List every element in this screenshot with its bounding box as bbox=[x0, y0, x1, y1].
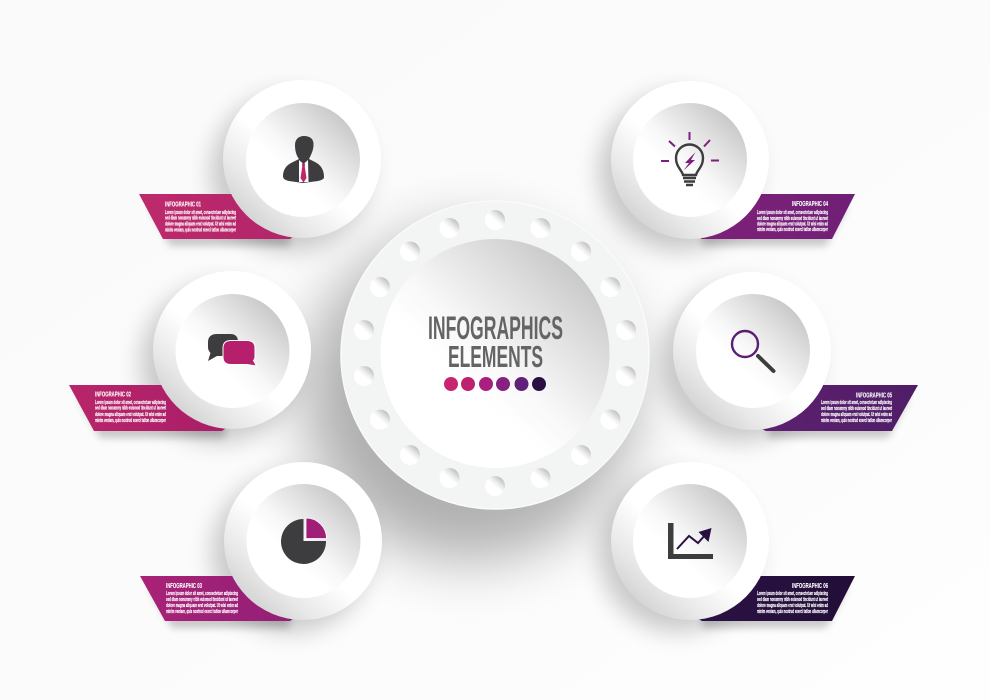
circle 01 bbox=[223, 80, 381, 238]
banner 04 text: sed diam nonummy nibh euismod tincidunt ut laoreet bbox=[757, 216, 828, 222]
banner 02 text: INFOGRAPHIC 02 bbox=[95, 392, 131, 398]
banner 05 bbox=[752, 385, 918, 431]
panel: infographic 06 bbox=[599, 462, 855, 632]
banner 01 text bbox=[165, 202, 236, 234]
banner 05 text: minim veniam, quis nostrud exerci tation ullamcorper bbox=[821, 418, 892, 424]
banner 01 text: dolore magna aliquam erat volutpat. Ut wisi enim ad bbox=[165, 222, 236, 228]
banner 03 text bbox=[166, 583, 238, 615]
banner 03 text: dolore magna aliquam erat volutpat. Ut wisi enim ad bbox=[166, 603, 238, 609]
circle 05 bbox=[673, 272, 831, 430]
central outer ring bbox=[341, 201, 649, 509]
banner 06 text: INFOGRAPHIC 06 bbox=[792, 583, 828, 590]
circle 04 bbox=[611, 81, 769, 239]
banner 01 text: sed diam nonummy nibh euismod tincidunt ut laoreet bbox=[165, 216, 236, 222]
ring of dimples bbox=[354, 210, 636, 496]
banner 05 text: INFOGRAPHIC 05 bbox=[856, 392, 892, 400]
central dish bbox=[380, 239, 610, 468]
banner 06 text: Lorem ipsum dolor sit amet, consectetuer adipiscing bbox=[757, 591, 828, 597]
banner 03 text: INFOGRAPHIC 03 bbox=[166, 583, 202, 590]
circle 03 bbox=[224, 462, 382, 620]
colour dots bbox=[444, 377, 546, 391]
panel: central circle bbox=[341, 201, 649, 509]
banner 01 text: minim veniam, quis nostrud exerci tation ullamcorper bbox=[165, 228, 236, 234]
banner 03 text: sed diam nonummy nibh euismod tincidunt ut laoreet bbox=[166, 597, 238, 603]
banner 02 text bbox=[95, 392, 166, 424]
banner 06 text: minim veniam, quis nostrud exerci tation ullamcorper bbox=[757, 609, 828, 615]
icon: businessman bbox=[283, 136, 324, 183]
central shadow bbox=[305, 230, 635, 560]
icon: speech bubbles bbox=[208, 334, 256, 366]
icon: light bulb bbox=[661, 132, 719, 185]
icon: growth chart bbox=[668, 523, 713, 559]
banner 05 text: dolore magna aliquam erat volutpat. Ut wisi enim ad bbox=[821, 412, 892, 418]
circle 06 bbox=[611, 462, 769, 620]
banner 05 text: Lorem ipsum dolor sit amet, consectetuer adipiscing bbox=[821, 400, 892, 406]
panel: infographic 04 bbox=[599, 81, 855, 251]
panel: infographic 05 bbox=[661, 272, 918, 442]
title: INFOGRAPHICS bbox=[428, 310, 563, 346]
banner 04 text bbox=[757, 201, 828, 233]
banner 02 text: sed diam nonummy nibh euismod tincidunt ut laoreet bbox=[95, 406, 166, 412]
banner 02 text: minim veniam, quis nostrud exerci tation ullamcorper bbox=[95, 418, 166, 424]
icon: magnifier bbox=[732, 331, 774, 371]
banner 04 text: INFOGRAPHIC 04 bbox=[792, 201, 828, 208]
panel: infographic 03 bbox=[140, 462, 382, 632]
title: ELEMENTS bbox=[448, 339, 543, 374]
circle 02 bbox=[153, 271, 311, 429]
panel: infographic 02 bbox=[69, 271, 311, 442]
banner 01 text: Lorem ipsum dolor sit amet, consectetuer adipiscing bbox=[165, 210, 236, 216]
banner 05 text: sed diam nonummy nibh euismod tincidunt ut laoreet bbox=[821, 406, 892, 412]
banner 03 text: Lorem ipsum dolor sit amet, consectetuer adipiscing bbox=[166, 591, 238, 597]
banner 04 text: dolore magna aliquam erat volutpat. Ut wisi enim ad bbox=[757, 222, 828, 228]
banner 03 text: minim veniam, quis nostrud exerci tation ullamcorper bbox=[166, 609, 238, 615]
banner 04 text: minim veniam, quis nostrud exerci tation ullamcorper bbox=[757, 227, 828, 233]
banner 03 bbox=[140, 576, 300, 621]
banner 04 text: Lorem ipsum dolor sit amet, consectetuer adipiscing bbox=[757, 210, 828, 216]
banner 06 text bbox=[757, 583, 828, 615]
banner 05 text bbox=[821, 392, 892, 424]
banner 02 text: dolore magna aliquam erat volutpat. Ut wisi enim ad bbox=[95, 412, 166, 418]
banner 02 text: Lorem ipsum dolor sit amet, consectetuer adipiscing bbox=[95, 400, 166, 406]
banner 04 bbox=[690, 194, 855, 239]
icon: pie chart bbox=[281, 518, 326, 564]
banner 02 bbox=[69, 385, 230, 431]
banner 06 text: sed diam nonummy nibh euismod tincidunt ut laoreet bbox=[757, 597, 828, 603]
title bbox=[428, 310, 563, 374]
banner 06 text: dolore magna aliquam erat volutpat. Ut wisi enim ad bbox=[757, 603, 828, 609]
panel: infographic 01 bbox=[139, 80, 381, 251]
banner 01 text: INFOGRAPHIC 01 bbox=[165, 202, 201, 208]
banner 01 bbox=[139, 194, 300, 239]
banner 06 bbox=[690, 576, 855, 621]
